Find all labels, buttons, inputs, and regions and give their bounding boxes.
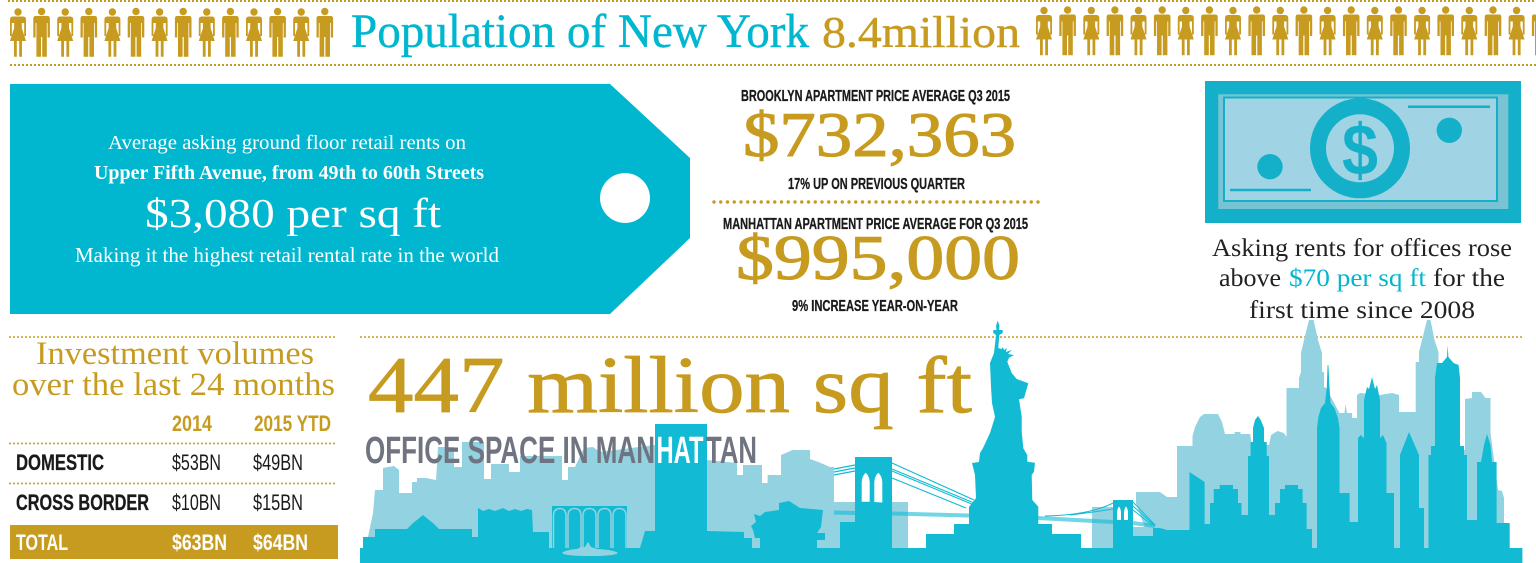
panel: investment volumes table	[10, 336, 338, 559]
title: 8.4million	[822, 8, 1020, 57]
icon row: people right	[1036, 6, 1536, 55]
icon row: people left	[10, 8, 333, 57]
panel: Manhattan apartment price	[723, 216, 1028, 315]
row: domestic: $53BN	[172, 450, 221, 475]
row: total: TOTAL	[16, 530, 68, 555]
tag text	[75, 132, 499, 267]
panel: Brooklyn apartment price: $732,363	[743, 99, 1016, 170]
panel: retail rent price tag	[10, 84, 690, 314]
tag text: Upper Fifth Avenue, from 49th to 60th Streets	[94, 162, 484, 184]
tag text: $3,080 per sq ft	[145, 190, 442, 236]
icon: dollar bill: $	[1342, 110, 1378, 190]
tag shape with hole	[10, 84, 690, 314]
text block: office asking rents	[1212, 233, 1512, 324]
panel: Brooklyn apartment price	[741, 88, 1016, 193]
heading: over the last 24 months	[12, 367, 335, 403]
column headers: 2015 YTD	[254, 411, 331, 436]
text block: office asking rents: $70 per sq ft	[1289, 263, 1426, 292]
row: cross border: $10BN	[172, 490, 221, 515]
row: domestic: $49BN	[253, 450, 303, 475]
row: cross border	[16, 490, 303, 515]
row: total	[10, 525, 338, 559]
column headers	[172, 411, 331, 436]
bridge cables and decks	[834, 463, 1155, 526]
small dome	[635, 536, 643, 548]
heading: Investment volumes	[36, 336, 314, 372]
row: cross border: CROSS BORDER	[16, 490, 149, 515]
heading	[12, 336, 335, 403]
panel: Manhattan apartment price: 9% INCREASE YEAR-ON-YEAR	[792, 298, 958, 315]
tag text: Making it the highest retail rental rate in the world	[75, 243, 499, 267]
text block: office asking rents: Asking rents for offices rose	[1212, 233, 1512, 262]
panel: Manhattan apartment price: MANHATTAN APARTMENT PRICE AVERAGE FOR Q3 2015	[723, 216, 1028, 233]
boat silhouette	[562, 542, 618, 556]
icon: dollar bill	[1205, 81, 1521, 223]
row: cross border: $15BN	[253, 490, 303, 515]
column headers: 2014	[172, 411, 213, 436]
illustration: New York skyline	[360, 320, 1522, 563]
text block: office asking rents: above	[1219, 263, 1281, 292]
row: total: $64BN	[253, 530, 308, 555]
panel: Brooklyn apartment price: BROOKLYN APARTMENT PRICE AVERAGE Q3 2015	[741, 88, 1010, 105]
row: domestic	[16, 450, 303, 475]
subheading: office space in Manhattan: HAT	[656, 430, 704, 472]
subheading: office space in Manhattan: TAN	[706, 430, 757, 472]
title	[351, 5, 1020, 58]
row: total: $63BN	[172, 530, 227, 555]
bridge tower windows	[862, 473, 1128, 520]
concert hall arches	[554, 508, 626, 548]
text block: office asking rents: for the	[1433, 263, 1505, 292]
headline: 447 million sq ft: 447 million sq ft	[368, 342, 972, 430]
skyline front layer with statue of liberty	[360, 320, 1522, 563]
subheading: office space in Manhattan: OFFICE SPACE IN MAN	[365, 430, 655, 472]
panel: Manhattan apartment price: $995,000	[736, 222, 1020, 293]
row: domestic: DOMESTIC	[16, 450, 104, 475]
text block: office asking rents: first time since 2008	[1249, 295, 1475, 324]
skyline back layer	[368, 320, 1504, 550]
tag text: Average asking ground floor retail rents on	[108, 132, 466, 154]
title: Population of New York	[351, 5, 809, 58]
panel: Brooklyn apartment price: 17% UP ON PREVIOUS QUARTER	[788, 176, 965, 193]
